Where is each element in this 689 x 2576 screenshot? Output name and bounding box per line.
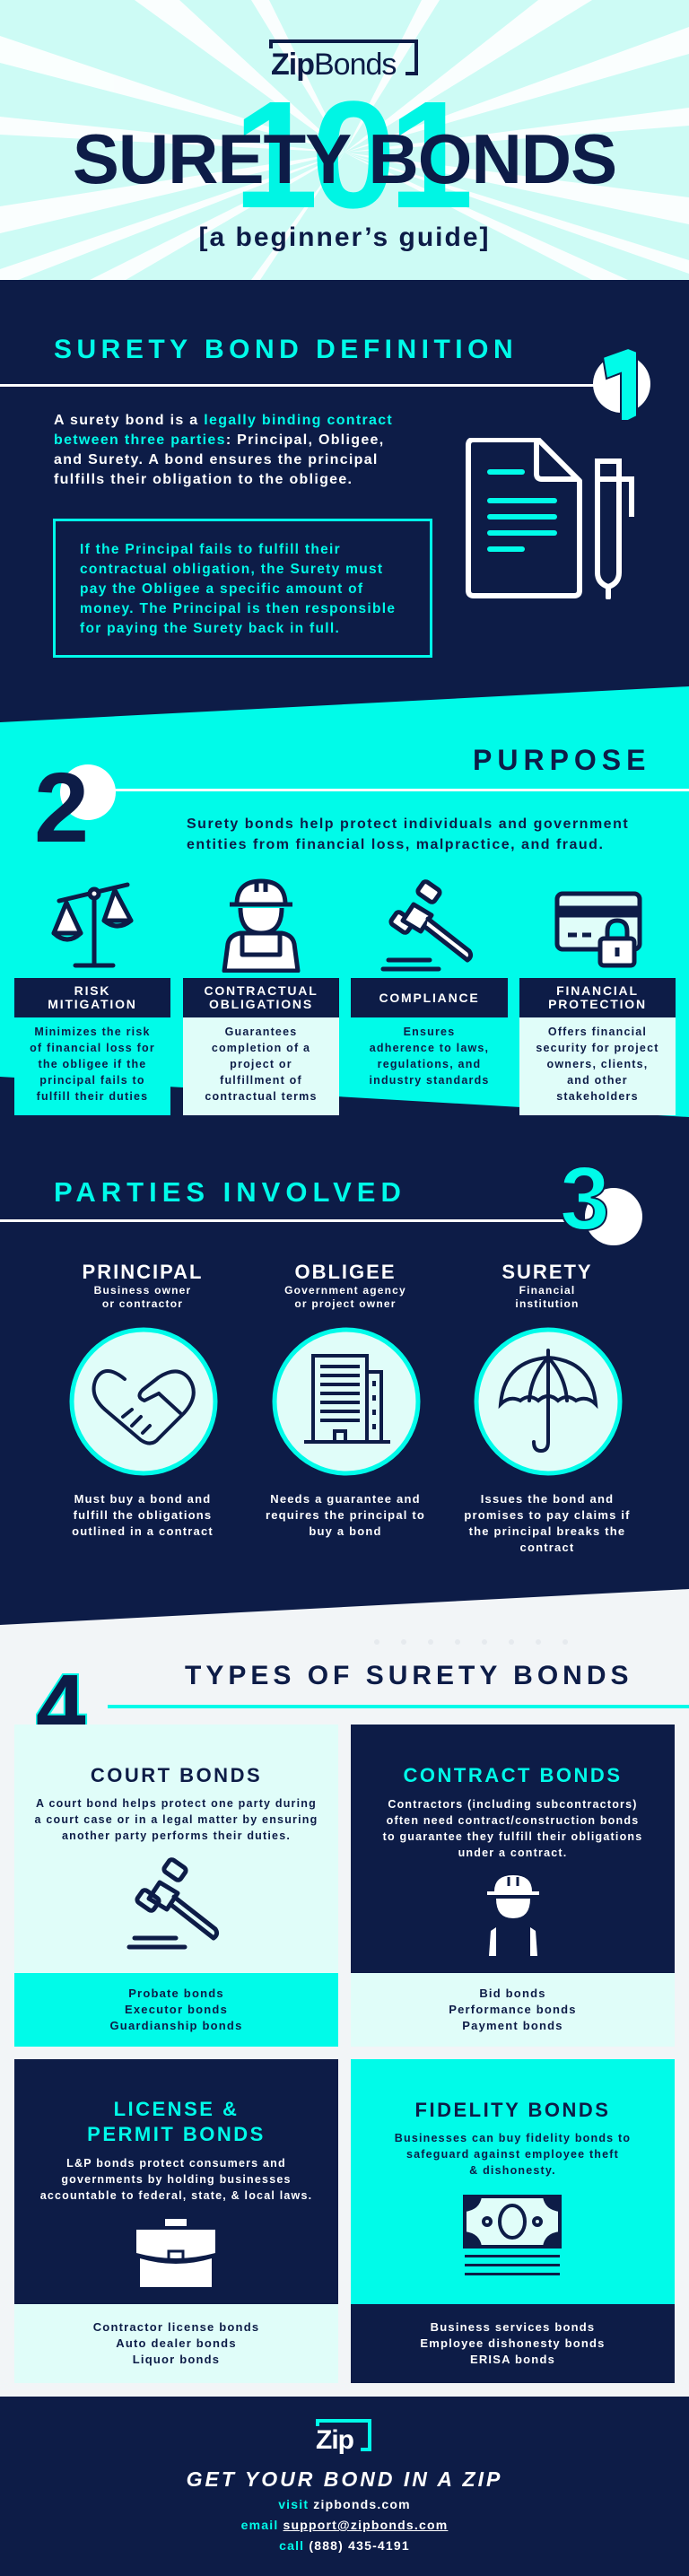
- callout box: contractual obligation, the Surety must: [80, 562, 383, 577]
- text: contract bonds: often need contract/construction bonds: [387, 1814, 639, 1827]
- text: contractual obligations: contractual terms: [205, 1090, 318, 1103]
- definition paragraph: and Surety. A bond ensures the principal: [54, 452, 379, 467]
- list: contract bonds: Payment bonds: [462, 2019, 563, 2032]
- section 1 line and number: [0, 349, 650, 420]
- icon: gavel: [380, 879, 474, 971]
- text: contract bonds: to guarantee they fulfill their obligations: [383, 1830, 642, 1843]
- list: fidelity bonds: Employee dishonesty bonds: [420, 2336, 606, 2350]
- list: court bonds: Guardianship bonds: [109, 2019, 242, 2032]
- logo: ZipBonds: ZipBonds: [271, 48, 396, 82]
- section 2 heading: PURPOSE: [473, 744, 650, 776]
- icon: building circle: [273, 1328, 420, 1475]
- party: surety: [464, 1261, 631, 1554]
- footer tagline: GET YOUR BOND IN A ZIP: [187, 2467, 502, 2491]
- text: license & permit bonds: governments by holding businesses: [61, 2173, 292, 2186]
- text: financial protection: security for project: [536, 1042, 659, 1054]
- title: license & permit bonds: [87, 2098, 266, 2145]
- icon: document and pen: [466, 438, 634, 599]
- footer contacts: visit zipbonds.com: [278, 2497, 411, 2511]
- text: contractual obligations: completion of a: [212, 1042, 310, 1054]
- label: principal: [83, 1261, 203, 1310]
- list: court bonds: [14, 1973, 338, 2047]
- text: fidelity bonds: safeguard against employee theft: [406, 2148, 619, 2161]
- text: principal: fulfill the obligations: [74, 1508, 212, 1522]
- label: principal: or contractor: [102, 1297, 183, 1310]
- logo: ZipBonds: [269, 39, 418, 82]
- callout box: for paying the Surety back in full.: [80, 621, 340, 636]
- list: contract bonds: Performance bonds: [449, 2003, 577, 2016]
- purpose column: risk mitigation: [14, 883, 170, 1115]
- label: principal: PRINCIPAL: [83, 1261, 203, 1283]
- text: fidelity bonds: & dishonesty.: [469, 2164, 556, 2177]
- text: obligee: buy a bond: [309, 1524, 382, 1538]
- section 4 heading: TYPES OF SURETY BONDS: [185, 1661, 633, 1690]
- list: fidelity bonds: Business services bonds: [431, 2320, 595, 2334]
- text: risk mitigation: [14, 1017, 170, 1115]
- list: contract bonds: Bid bonds: [479, 1987, 546, 2000]
- purpose column: compliance: [351, 879, 508, 1087]
- icon: briefcase: [136, 2219, 215, 2287]
- text: principal: Must buy a bond and: [74, 1492, 211, 1506]
- text: principal: [72, 1492, 214, 1538]
- text: financial protection: Offers financial: [548, 1026, 647, 1038]
- text: financial protection: and other: [567, 1074, 628, 1087]
- text: principal: outlined in a contract: [72, 1524, 214, 1538]
- list: license & permit bonds: Contractor license bonds: [93, 2320, 259, 2334]
- card: contract bonds: [351, 1725, 675, 2047]
- text: compliance: regulations, and: [378, 1058, 481, 1070]
- text: fidelity bonds: [395, 2132, 631, 2177]
- text: risk mitigation: of financial loss for: [30, 1042, 155, 1054]
- card: court bonds: [14, 1725, 338, 2047]
- text: obligee: [266, 1492, 425, 1538]
- purpose intro: [187, 816, 629, 852]
- text: surety: the principal breaks the: [469, 1524, 625, 1538]
- callout box: If the Principal fails to fulfill their: [80, 542, 341, 557]
- purpose intro: entities from financial loss, malpractice, and fraud.: [187, 837, 604, 852]
- header: risk mitigation: MITIGATION: [48, 997, 137, 1011]
- party: principal: [70, 1261, 217, 1538]
- text: contract bonds: under a contract.: [458, 1847, 567, 1859]
- text: compliance: industry standards: [369, 1074, 490, 1087]
- text: license & permit bonds: accountable to federal, state, & local laws.: [40, 2189, 312, 2202]
- text: court bonds: another party performs their duties.: [62, 1829, 291, 1842]
- header: compliance: COMPLIANCE: [379, 991, 480, 1005]
- title: court bonds: COURT BONDS: [91, 1764, 262, 1786]
- section 4 line and number: [36, 1665, 689, 1742]
- label: obligee: Government agency: [284, 1284, 406, 1297]
- text: financial protection: stakeholders: [556, 1090, 639, 1103]
- purpose column: financial protection: [519, 892, 676, 1115]
- text: risk mitigation: principal fails to: [39, 1074, 145, 1087]
- card: fidelity bonds: [351, 2059, 675, 2383]
- section 3 heading: PARTIES INVOLVED: [54, 1176, 406, 1208]
- text: court bonds: A court bond helps protect one party during: [36, 1797, 317, 1810]
- header: risk mitigation: RISK: [74, 983, 110, 998]
- text: contract bonds: [382, 1798, 642, 1859]
- list: court bonds: Probate bonds: [128, 1987, 224, 2000]
- text: surety: promises to pay claims if: [464, 1508, 631, 1522]
- label: surety: institution: [515, 1297, 580, 1310]
- definition paragraph: A surety bond is a legally binding contract: [54, 413, 393, 428]
- callout box: pay the Obligee a specific amount of: [80, 581, 363, 597]
- icon: card and lock: [554, 892, 642, 967]
- section 3 line and number: [0, 1157, 642, 1249]
- callout box: [53, 519, 432, 658]
- list: license & permit bonds: Auto dealer bonds: [116, 2336, 237, 2350]
- header: financial protection: FINANCIAL: [556, 983, 639, 998]
- icon: handshake circle: [70, 1328, 217, 1475]
- label: principal: Business owner: [94, 1284, 191, 1297]
- text: risk mitigation: the obligee if the: [39, 1058, 146, 1070]
- text: financial protection: owners, clients,: [547, 1058, 648, 1070]
- footer contacts: [0, 2494, 689, 2556]
- text: compliance: Ensures: [404, 1026, 455, 1038]
- text: fidelity bonds: Businesses can buy fidelity bonds to: [395, 2132, 631, 2144]
- definition paragraph: between three parties: Principal, Obligee,: [54, 432, 384, 448]
- text: contractual obligations: Guarantees: [225, 1026, 297, 1038]
- text: contractual obligations: fulfillment of: [220, 1074, 302, 1087]
- header: financial protection: [519, 978, 676, 1017]
- text: obligee: Needs a guarantee and: [270, 1492, 421, 1506]
- text: court bonds: [34, 1797, 318, 1842]
- text: contract bonds: Contractors (including subcontractors): [388, 1798, 638, 1811]
- text: license & permit bonds: [40, 2157, 312, 2202]
- text: surety: [464, 1492, 631, 1554]
- text: court bonds: a court case or in a legal matter by ensuring: [35, 1813, 318, 1826]
- footer contacts: email support@zipbonds.com: [241, 2518, 448, 2532]
- footer logo: Zip: [316, 2419, 373, 2460]
- header: compliance: [351, 978, 508, 1017]
- icon: umbrella circle: [474, 1328, 623, 1475]
- text: risk mitigation: fulfill their duties: [37, 1090, 148, 1103]
- list: court bonds: Executor bonds: [125, 2003, 228, 2016]
- header: financial protection: PROTECTION: [548, 997, 647, 1011]
- text: compliance: [351, 1017, 508, 1094]
- list: contract bonds: [351, 1973, 675, 2047]
- title: fidelity bonds: FIDELITY BONDS: [415, 2099, 610, 2121]
- subtitle: [a beginner’s guide]: [198, 223, 491, 252]
- icon: worker: [487, 1875, 539, 1956]
- text: financial protection: [519, 1017, 676, 1115]
- label: obligee: [284, 1261, 406, 1310]
- text: obligee: requires the principal to: [266, 1508, 425, 1522]
- definition paragraph: fulfills their obligation to the obligee.: [54, 472, 353, 487]
- title: license & permit bonds: PERMIT BONDS: [87, 2123, 266, 2145]
- list: fidelity bonds: [351, 2304, 675, 2383]
- header: contractual obligations: OBLIGATIONS: [209, 997, 313, 1011]
- party: obligee: [266, 1261, 425, 1538]
- text: risk mitigation: Minimizes the risk: [34, 1026, 151, 1038]
- list: license & permit bonds: [14, 2304, 338, 2383]
- text: surety: contract: [520, 1541, 574, 1554]
- section 2 line and number: [34, 761, 689, 845]
- title: contract bonds: CONTRACT BONDS: [404, 1764, 623, 1786]
- section 1 heading: SURETY BOND DEFINITION: [54, 335, 518, 364]
- list: license & permit bonds: Liquor bonds: [133, 2353, 220, 2366]
- card: license & permit bonds: [14, 2059, 338, 2383]
- text: surety: Issues the bond and: [481, 1492, 614, 1506]
- callout box: money. The Principal is then responsible: [80, 601, 396, 616]
- title: SURETY BONDS: [73, 119, 616, 198]
- list: fidelity bonds: ERISA bonds: [470, 2353, 555, 2366]
- icon: money: [462, 2194, 563, 2283]
- purpose intro: Surety bonds help protect individuals and government: [187, 816, 629, 832]
- definition paragraph: [54, 413, 393, 487]
- footer logo: Zip: Zip: [316, 2425, 353, 2455]
- text: contractual obligations: project or: [230, 1058, 292, 1070]
- text: license & permit bonds: L&P bonds protect consumers and: [66, 2157, 286, 2170]
- text: compliance: adherence to laws,: [370, 1042, 489, 1054]
- label: obligee: OBLIGEE: [294, 1261, 397, 1283]
- footer contacts: call (888) 435-4191: [279, 2538, 410, 2553]
- label: surety: [501, 1261, 593, 1310]
- icon: worker: [222, 879, 300, 973]
- purpose column: contractual obligations: [183, 879, 339, 1115]
- text: contractual obligations: [183, 1017, 339, 1115]
- label: obligee: or project owner: [294, 1297, 397, 1310]
- header: risk mitigation: [14, 978, 170, 1017]
- header: contractual obligations: CONTRACTUAL: [204, 983, 318, 998]
- header: contractual obligations: [183, 978, 339, 1017]
- icon: gavel: [127, 1857, 219, 1949]
- label: surety: Financial: [519, 1284, 575, 1297]
- label: surety: SURETY: [501, 1261, 593, 1283]
- icon: scales: [52, 883, 133, 967]
- title: license & permit bonds: LICENSE &: [114, 2098, 239, 2120]
- big 101: 101: [233, 70, 467, 240]
